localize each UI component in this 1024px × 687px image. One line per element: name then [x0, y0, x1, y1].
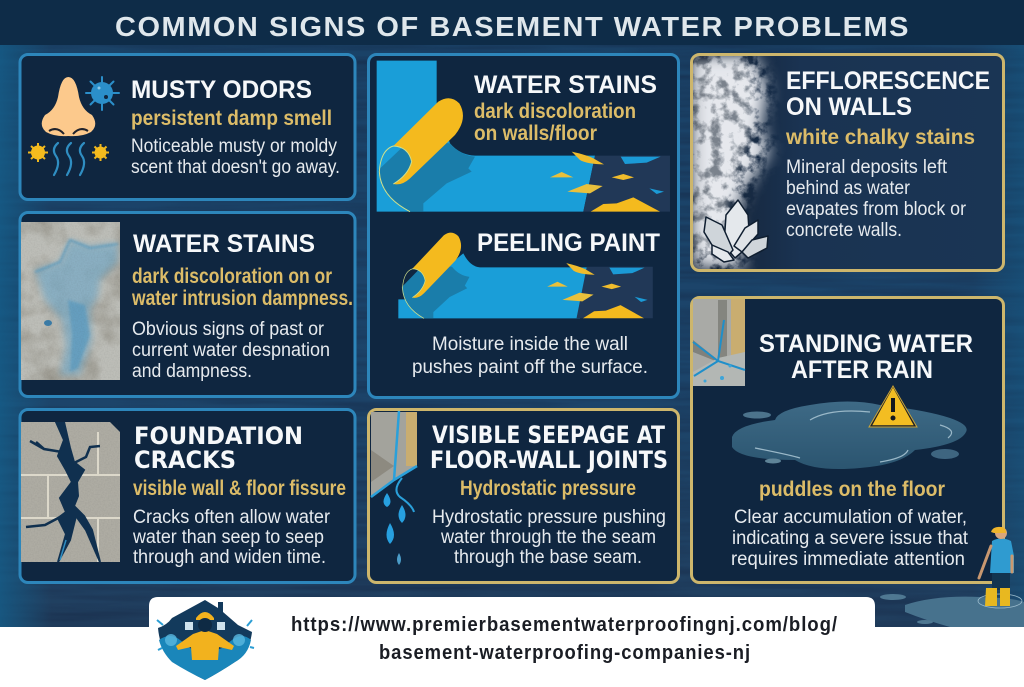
subheading: on walls/floor — [474, 122, 597, 145]
description: Obvious signs of past or — [132, 319, 325, 340]
heading: EFFLORESCENCE — [786, 67, 990, 95]
panel: foundation cracks — [20, 410, 355, 582]
subheading: white chalky stains — [785, 126, 975, 149]
subheading: puddles on the floor — [759, 478, 945, 501]
heading — [430, 421, 668, 474]
panel: water stains and peeling paint — [368, 54, 678, 398]
image: stained concrete wall — [21, 222, 120, 380]
subheading: Hydrostatic pressure — [460, 477, 636, 500]
description: pushes paint off the surface. — [412, 357, 648, 378]
icon: nose with mold spores — [28, 77, 119, 175]
description — [132, 319, 330, 382]
panel: water stains left — [20, 212, 355, 396]
description: water through tte the seam — [440, 527, 656, 548]
heading — [759, 330, 973, 384]
description — [131, 136, 340, 178]
panel: musty odors — [20, 54, 355, 200]
description — [432, 507, 666, 568]
illustration: peeling wall surface — [377, 61, 670, 212]
heading: STANDING WATER — [759, 330, 973, 358]
heading: MUSTY ODORS — [131, 76, 312, 104]
subheading — [131, 265, 353, 310]
description: Mineral deposits left — [786, 157, 948, 178]
description: Cracks often allow water — [133, 507, 331, 528]
heading: AFTER RAIN — [791, 356, 933, 384]
panel: efflorescence — [692, 54, 1004, 270]
puddle near worker — [880, 594, 1024, 627]
description: evapates from block or — [786, 199, 967, 220]
illustration: peeling paint roll — [398, 233, 653, 318]
description: indicating a severe issue that — [732, 528, 969, 549]
subheading: visible wall & floor fissure — [133, 477, 346, 500]
heading: WATER STAINS — [474, 71, 657, 99]
website url: https://www.premierbasementwaterproofingnj.com/blog/ — [291, 614, 838, 636]
subheading: dark discoloration on or — [132, 265, 332, 288]
description: Noticeable musty or moldy — [131, 136, 337, 157]
description — [786, 157, 967, 241]
title banner — [0, 0, 1024, 45]
description: through and widen time. — [133, 547, 326, 568]
heading: FOUNDATION — [134, 422, 303, 450]
description: Moisture inside the wall — [432, 334, 628, 355]
icon: worker in boots — [979, 527, 1014, 606]
website url: basement-waterproofing-companies-nj — [379, 642, 751, 664]
heading: ON WALLS — [786, 93, 912, 121]
logo: waterproofing shield — [157, 600, 254, 680]
description: behind as water — [786, 178, 911, 199]
heading: CRACKS — [134, 446, 236, 474]
heading: FLOOR-WALL JOINTS — [430, 446, 668, 474]
description: and dampness. — [132, 361, 252, 382]
heading — [786, 67, 990, 121]
website url — [291, 614, 838, 664]
description: current water despnation — [132, 340, 330, 361]
panel: standing water — [692, 298, 1004, 582]
panel: visible seepage — [368, 410, 678, 582]
illustration: puddle — [732, 402, 967, 469]
heading: VISIBLE SEEPAGE AT — [432, 421, 666, 449]
description — [412, 334, 648, 378]
description: concrete walls. — [786, 220, 902, 241]
description: Hydrostatic pressure pushing — [432, 507, 666, 528]
icon: crystal cluster — [704, 200, 768, 262]
title banner: COMMON SIGNS OF BASEMENT WATER PROBLEMS — [115, 11, 910, 42]
description: through the base seam. — [454, 547, 642, 568]
description: water than seep to seep — [132, 527, 324, 548]
description — [132, 507, 331, 568]
heading: PEELING PAINT — [477, 229, 660, 257]
subheading: dark discoloration — [474, 100, 636, 123]
image: white chalk deposit — [693, 56, 770, 268]
description: Clear accumulation of water, — [734, 507, 967, 528]
description — [731, 507, 969, 570]
icon: warning triangle — [869, 386, 917, 427]
heading — [134, 422, 303, 474]
image: wall corner seepage — [693, 299, 745, 386]
description: requires immediate attention — [731, 549, 965, 570]
image: seeping wall joint — [371, 411, 417, 565]
footer band — [0, 597, 1024, 687]
description: scent that doesn't go away. — [131, 157, 340, 178]
image: cracked block wall — [21, 422, 120, 562]
subheading: persistent damp smell — [131, 107, 332, 130]
subheading: water intrusion dampness. — [131, 287, 353, 310]
heading: WATER STAINS — [133, 230, 315, 258]
subheading — [474, 100, 636, 145]
